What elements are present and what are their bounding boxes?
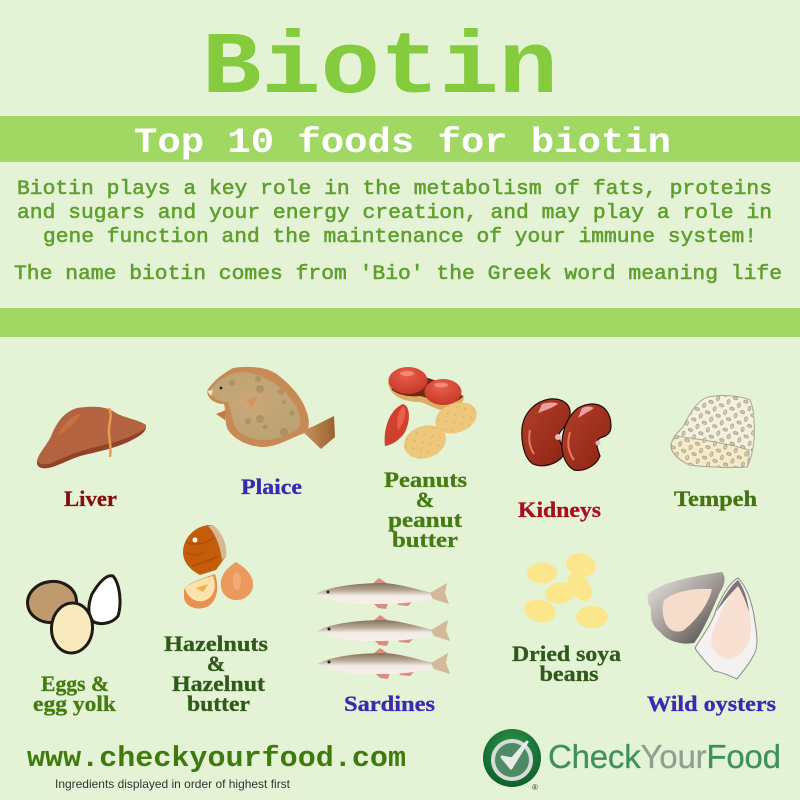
registered mark: ®	[532, 783, 538, 792]
food item: wild oysters	[647, 572, 776, 716]
label: Peanuts and peanut butter: &	[416, 487, 434, 512]
food item: soya beans	[512, 550, 621, 686]
food item: kidneys	[518, 399, 611, 522]
label: Peanuts and peanut butter: Peanuts	[384, 467, 467, 492]
icon: sardine three	[317, 648, 450, 679]
icon: tempeh	[671, 396, 754, 467]
intro text block: Biotin plays a key role in the metabolism of fats, proteins	[17, 178, 772, 201]
label: Wild oysters: Wild oysters	[647, 691, 776, 716]
label: Hazelnuts and Hazelnut butter	[164, 631, 268, 716]
label: Tempeh: Tempeh	[674, 486, 757, 511]
label: Peanuts and peanut butter: peanut	[388, 507, 463, 532]
logo wordmark: CheckYourFood	[548, 738, 781, 775]
label: Sardines: Sardines	[344, 691, 435, 716]
label: Hazelnuts and Hazelnut butter: butter	[187, 691, 250, 716]
label: Dried soya beans: Dried soya	[512, 641, 621, 666]
intro text block: gene function and the maintenance of your immune system!	[43, 226, 757, 249]
subtitle banner	[0, 116, 800, 163]
intro text block	[14, 178, 782, 286]
icon: sardines	[316, 578, 450, 679]
icon: hazelnuts	[183, 525, 253, 609]
food item: hazelnuts	[164, 525, 268, 716]
label: Peanuts and peanut butter	[384, 467, 467, 552]
label: Eggs and egg yolk	[33, 671, 117, 716]
label: Eggs and egg yolk: egg yolk	[33, 691, 117, 716]
food item: peanuts	[384, 367, 481, 552]
icon: eggs	[25, 576, 120, 654]
label: Kidneys: Kidneys	[518, 497, 601, 522]
website url: www.checkyourfood.com	[27, 742, 406, 775]
label: Plaice: Plaice	[241, 474, 302, 499]
icon: sardine two	[317, 615, 450, 646]
label: Hazelnuts and Hazelnut butter: Hazelnuts	[164, 631, 268, 656]
footnote: Ingredients displayed in order of highest first	[55, 777, 291, 791]
icon: peanuts	[385, 367, 481, 464]
divider band	[0, 308, 800, 337]
intro text block: and sugars and your energy creation, and may play a role in	[17, 202, 772, 225]
food item: eggs	[25, 576, 120, 716]
label: Peanuts and peanut butter: butter	[392, 527, 458, 552]
label: Hazelnuts and Hazelnut butter: Hazelnut	[172, 671, 266, 696]
icon: kidneys	[522, 399, 611, 470]
icon: sardine one	[316, 578, 449, 609]
icon: liver	[37, 407, 146, 468]
label: Eggs and egg yolk: Eggs &	[41, 671, 109, 696]
intro text block: The name biotin comes from 'Bio' the Greek word meaning life	[14, 263, 782, 286]
food item: tempeh	[671, 396, 757, 511]
label: Hazelnuts and Hazelnut butter: &	[207, 651, 225, 676]
food item: sardines	[316, 578, 450, 716]
label: Dried soya beans	[512, 641, 621, 686]
food item: liver	[37, 407, 146, 511]
subtitle banner: Top 10 foods for biotin	[134, 123, 671, 163]
logo	[483, 729, 781, 792]
icon: soya beans	[522, 550, 608, 628]
label: Liver: Liver	[64, 486, 117, 511]
icon: plaice	[207, 367, 335, 449]
icon: logo badge	[483, 729, 541, 787]
food item: plaice	[207, 367, 335, 499]
title: Biotin	[202, 20, 558, 119]
icon: wild oysters	[648, 572, 757, 679]
label: Dried soya beans: beans	[540, 661, 599, 686]
